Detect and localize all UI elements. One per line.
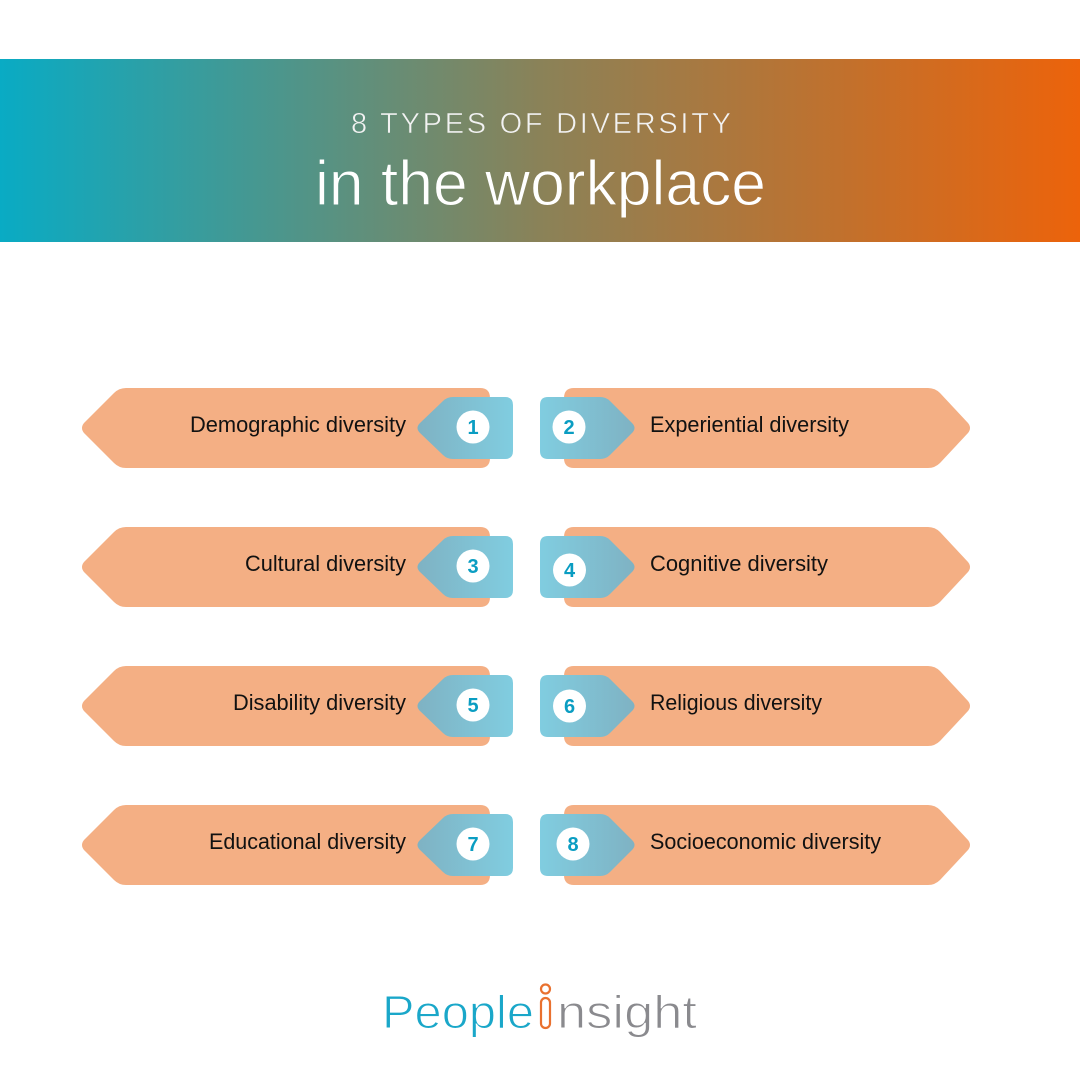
item 1: demographic diversity: 1 — [467, 417, 479, 439]
item 2: experiential diversity: 2 — [563, 417, 575, 439]
item 1: demographic diversity: Demographic diversity — [190, 412, 406, 437]
item 7: educational diversity: Educational diversity — [209, 829, 406, 854]
item 7: educational diversity: 7 — [467, 834, 479, 856]
item 4: cognitive diversity: 4 — [564, 560, 576, 582]
item 8: socioeconomic diversity: Socioeconomic diversity — [650, 829, 881, 854]
item 5: disability diversity: 5 — [467, 695, 479, 717]
item 3: cultural diversity: Cultural diversity — [245, 551, 406, 576]
item 3: cultural diversity: 3 — [467, 556, 479, 578]
item 4: cognitive diversity — [540, 527, 970, 607]
title line 1: 8 TYPES OF DIVERSITY — [351, 108, 731, 140]
item 7: educational diversity — [82, 805, 513, 885]
title line 2: in the workplace — [315, 149, 766, 219]
item 1: demographic diversity — [82, 388, 513, 468]
item 2: experiential diversity — [540, 388, 970, 468]
item 2: experiential diversity: Experiential diversity — [650, 412, 849, 437]
header banner — [0, 59, 1080, 242]
item 6: religious diversity — [540, 666, 970, 746]
logo: People Insight — [382, 984, 697, 1038]
item 5: disability diversity: Disability diversity — [233, 690, 406, 715]
item 8: socioeconomic diversity — [540, 805, 970, 885]
item 4: cognitive diversity: Cognitive diversity — [650, 551, 828, 576]
logo: People Insight: People — [382, 986, 534, 1038]
item 6: religious diversity: 6 — [564, 696, 575, 718]
item 8: socioeconomic diversity: 8 — [567, 834, 579, 856]
item 6: religious diversity: Religious diversity — [650, 690, 822, 715]
item 3: cultural diversity — [82, 527, 513, 607]
logo: People Insight: nsight — [557, 986, 697, 1038]
item 5: disability diversity — [82, 666, 513, 746]
